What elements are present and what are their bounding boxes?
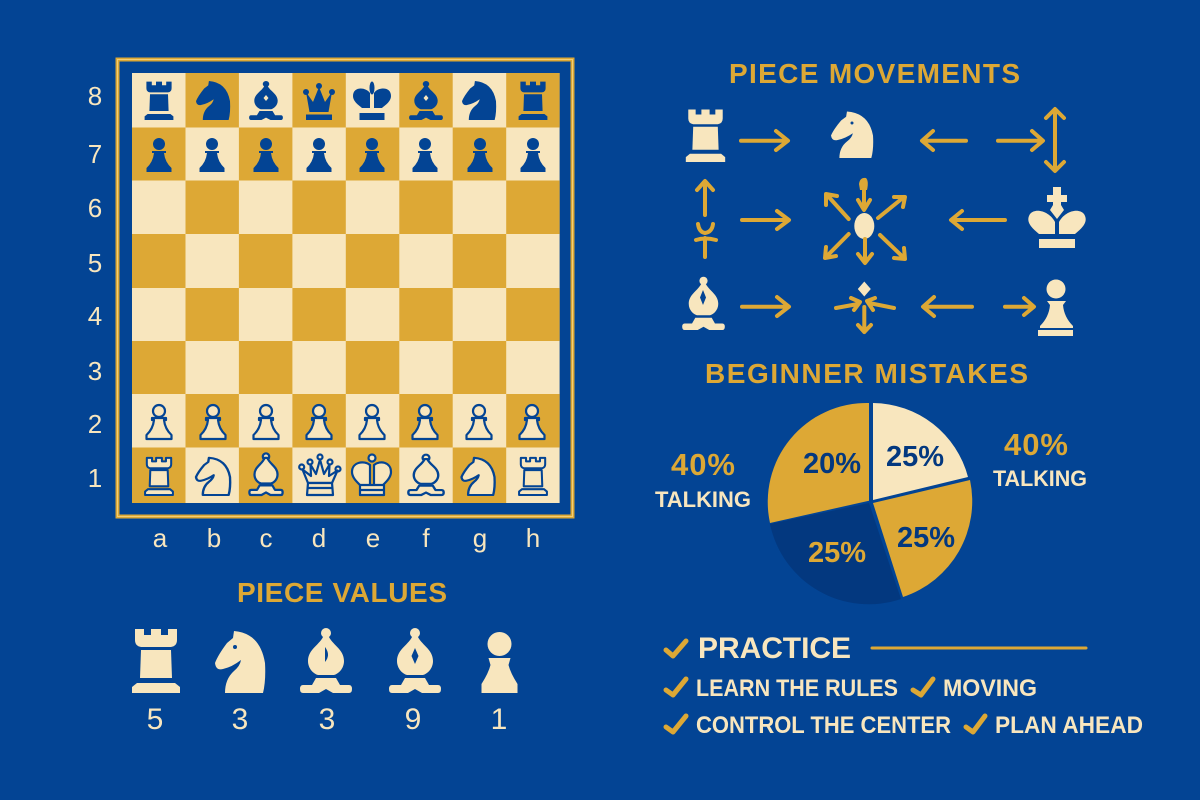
slice: 20%: 20%	[803, 448, 861, 480]
file labels: g	[473, 523, 487, 553]
callout: left 40% talking	[655, 447, 751, 512]
arrow right to cross	[998, 131, 1043, 150]
file labels: c	[260, 523, 272, 553]
dark pieces back rank	[145, 81, 547, 120]
item: plan ahead: PLAN AHEAD	[995, 712, 1143, 739]
slice: 25% light: 25%	[886, 441, 944, 473]
item: practice: PRACTICE	[698, 632, 851, 665]
item: learn the rules: LEARN THE RULES	[696, 675, 898, 702]
pie chart	[768, 403, 972, 604]
rank labels: 4	[88, 301, 102, 331]
arrow left from king	[951, 211, 1005, 229]
value: knight: 3	[232, 703, 248, 736]
piece movements diagram	[682, 109, 1086, 336]
chess board	[118, 60, 572, 516]
value: rook	[132, 629, 180, 736]
slice: 25% dark	[770, 503, 901, 604]
value: pawn: 1	[491, 703, 507, 736]
item: control the center: CONTROL THE CENTER	[696, 712, 951, 739]
rank labels: 7	[88, 139, 102, 169]
light pieces back rank	[145, 453, 547, 495]
slice: 20%	[768, 403, 869, 523]
rank labels: 3	[88, 356, 102, 386]
value: pawn	[482, 632, 518, 736]
file labels: h	[526, 523, 540, 553]
slice: 25% light	[873, 403, 968, 500]
rank labels: 1	[88, 463, 102, 493]
value: bishop	[300, 628, 352, 736]
file labels: e	[366, 523, 380, 553]
rank labels: 6	[88, 193, 102, 223]
arrow right to queen	[742, 211, 789, 229]
practice checklist	[666, 632, 1143, 739]
file labels: f	[422, 523, 430, 553]
arrow right from bishop	[742, 297, 789, 316]
file labels	[153, 523, 540, 553]
arrow left to knight	[922, 131, 966, 150]
callout: left 40% talking: 40%	[671, 447, 735, 482]
light king	[352, 454, 391, 495]
board squares	[132, 73, 560, 503]
file labels: b	[207, 523, 221, 553]
slice: 25% gold	[873, 480, 972, 597]
movement king	[1028, 187, 1086, 248]
rank labels: 5	[88, 248, 102, 278]
value: queen	[389, 628, 441, 736]
movement pawn	[1038, 280, 1073, 336]
heading: piece movements: PIECE MOVEMENTS	[729, 58, 1020, 89]
arrow rook to knight	[741, 131, 788, 150]
value: bishop: 3	[319, 703, 335, 736]
rook move glyph	[696, 224, 716, 257]
file labels: a	[153, 523, 168, 553]
slice: 25% gold: 25%	[897, 522, 955, 554]
rank labels	[88, 81, 102, 493]
heading: beginner mistakes: BEGINNER MISTAKES	[705, 358, 1028, 389]
movement knight	[831, 112, 873, 158]
file labels: d	[312, 523, 326, 553]
rank labels: 2	[88, 409, 102, 439]
queen star movement	[825, 178, 905, 263]
light queen	[299, 454, 340, 495]
rank labels: 8	[88, 81, 102, 111]
heading: piece values: PIECE VALUES	[237, 577, 447, 608]
callout: right 40% talking	[993, 427, 1087, 491]
value: knight	[215, 631, 265, 736]
board frame	[118, 60, 572, 516]
movement bishop	[682, 277, 725, 330]
arrow right to pawn	[1005, 298, 1034, 315]
arrow left	[923, 297, 972, 316]
up arrow	[697, 181, 713, 215]
bishop diagonal glyph	[836, 282, 894, 332]
callout: right 40% talking: 40%	[1004, 427, 1068, 462]
value: queen: 9	[405, 703, 421, 736]
vertical double arrow	[1046, 109, 1064, 171]
movement rook	[686, 110, 725, 162]
value: rook: 5	[147, 703, 163, 736]
slice: 25% dark: 25%	[808, 537, 866, 569]
piece values row	[132, 628, 518, 736]
item: practice	[666, 632, 1086, 665]
callout: right 40% talking: TALKING	[993, 466, 1087, 491]
item: moving: MOVING	[943, 675, 1037, 702]
callout: left 40% talking: TALKING	[655, 487, 751, 512]
dark pawns	[146, 138, 546, 172]
light pawns	[146, 405, 544, 439]
